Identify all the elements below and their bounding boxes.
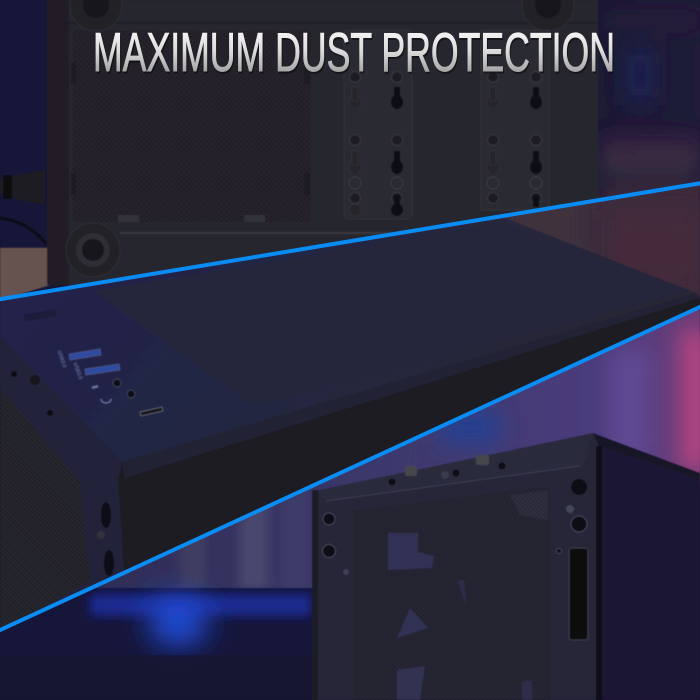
front face (118, 293, 700, 575)
panel: case rear top photo (0, 300, 700, 700)
chassis holes (11, 371, 114, 576)
feet (66, 0, 574, 277)
power cable (0, 170, 47, 245)
side mesh (0, 388, 90, 634)
USB ports and connectors: USB3.0 (56, 350, 67, 369)
mesh vent (71, 30, 311, 222)
divider: lower blue line (0, 306, 700, 631)
chassis holes and slot (322, 479, 588, 640)
rear mesh with fan (353, 486, 550, 700)
case body (47, 0, 598, 285)
desk surface (0, 248, 50, 300)
panel: case top with ports photo (0, 180, 700, 640)
left face (0, 336, 124, 606)
USB ports and connectors (24, 309, 163, 416)
USB ports and connectors: USB3.0 (72, 362, 83, 381)
top flange (318, 454, 580, 502)
divider: upper blue line (0, 183, 700, 300)
case back plate (312, 433, 600, 700)
top surface (0, 218, 696, 462)
desk with blue light (0, 588, 320, 700)
panel: case rear underside photo (0, 0, 700, 300)
case side face (593, 433, 700, 700)
mounting slots (344, 30, 549, 219)
top mesh (94, 245, 375, 398)
